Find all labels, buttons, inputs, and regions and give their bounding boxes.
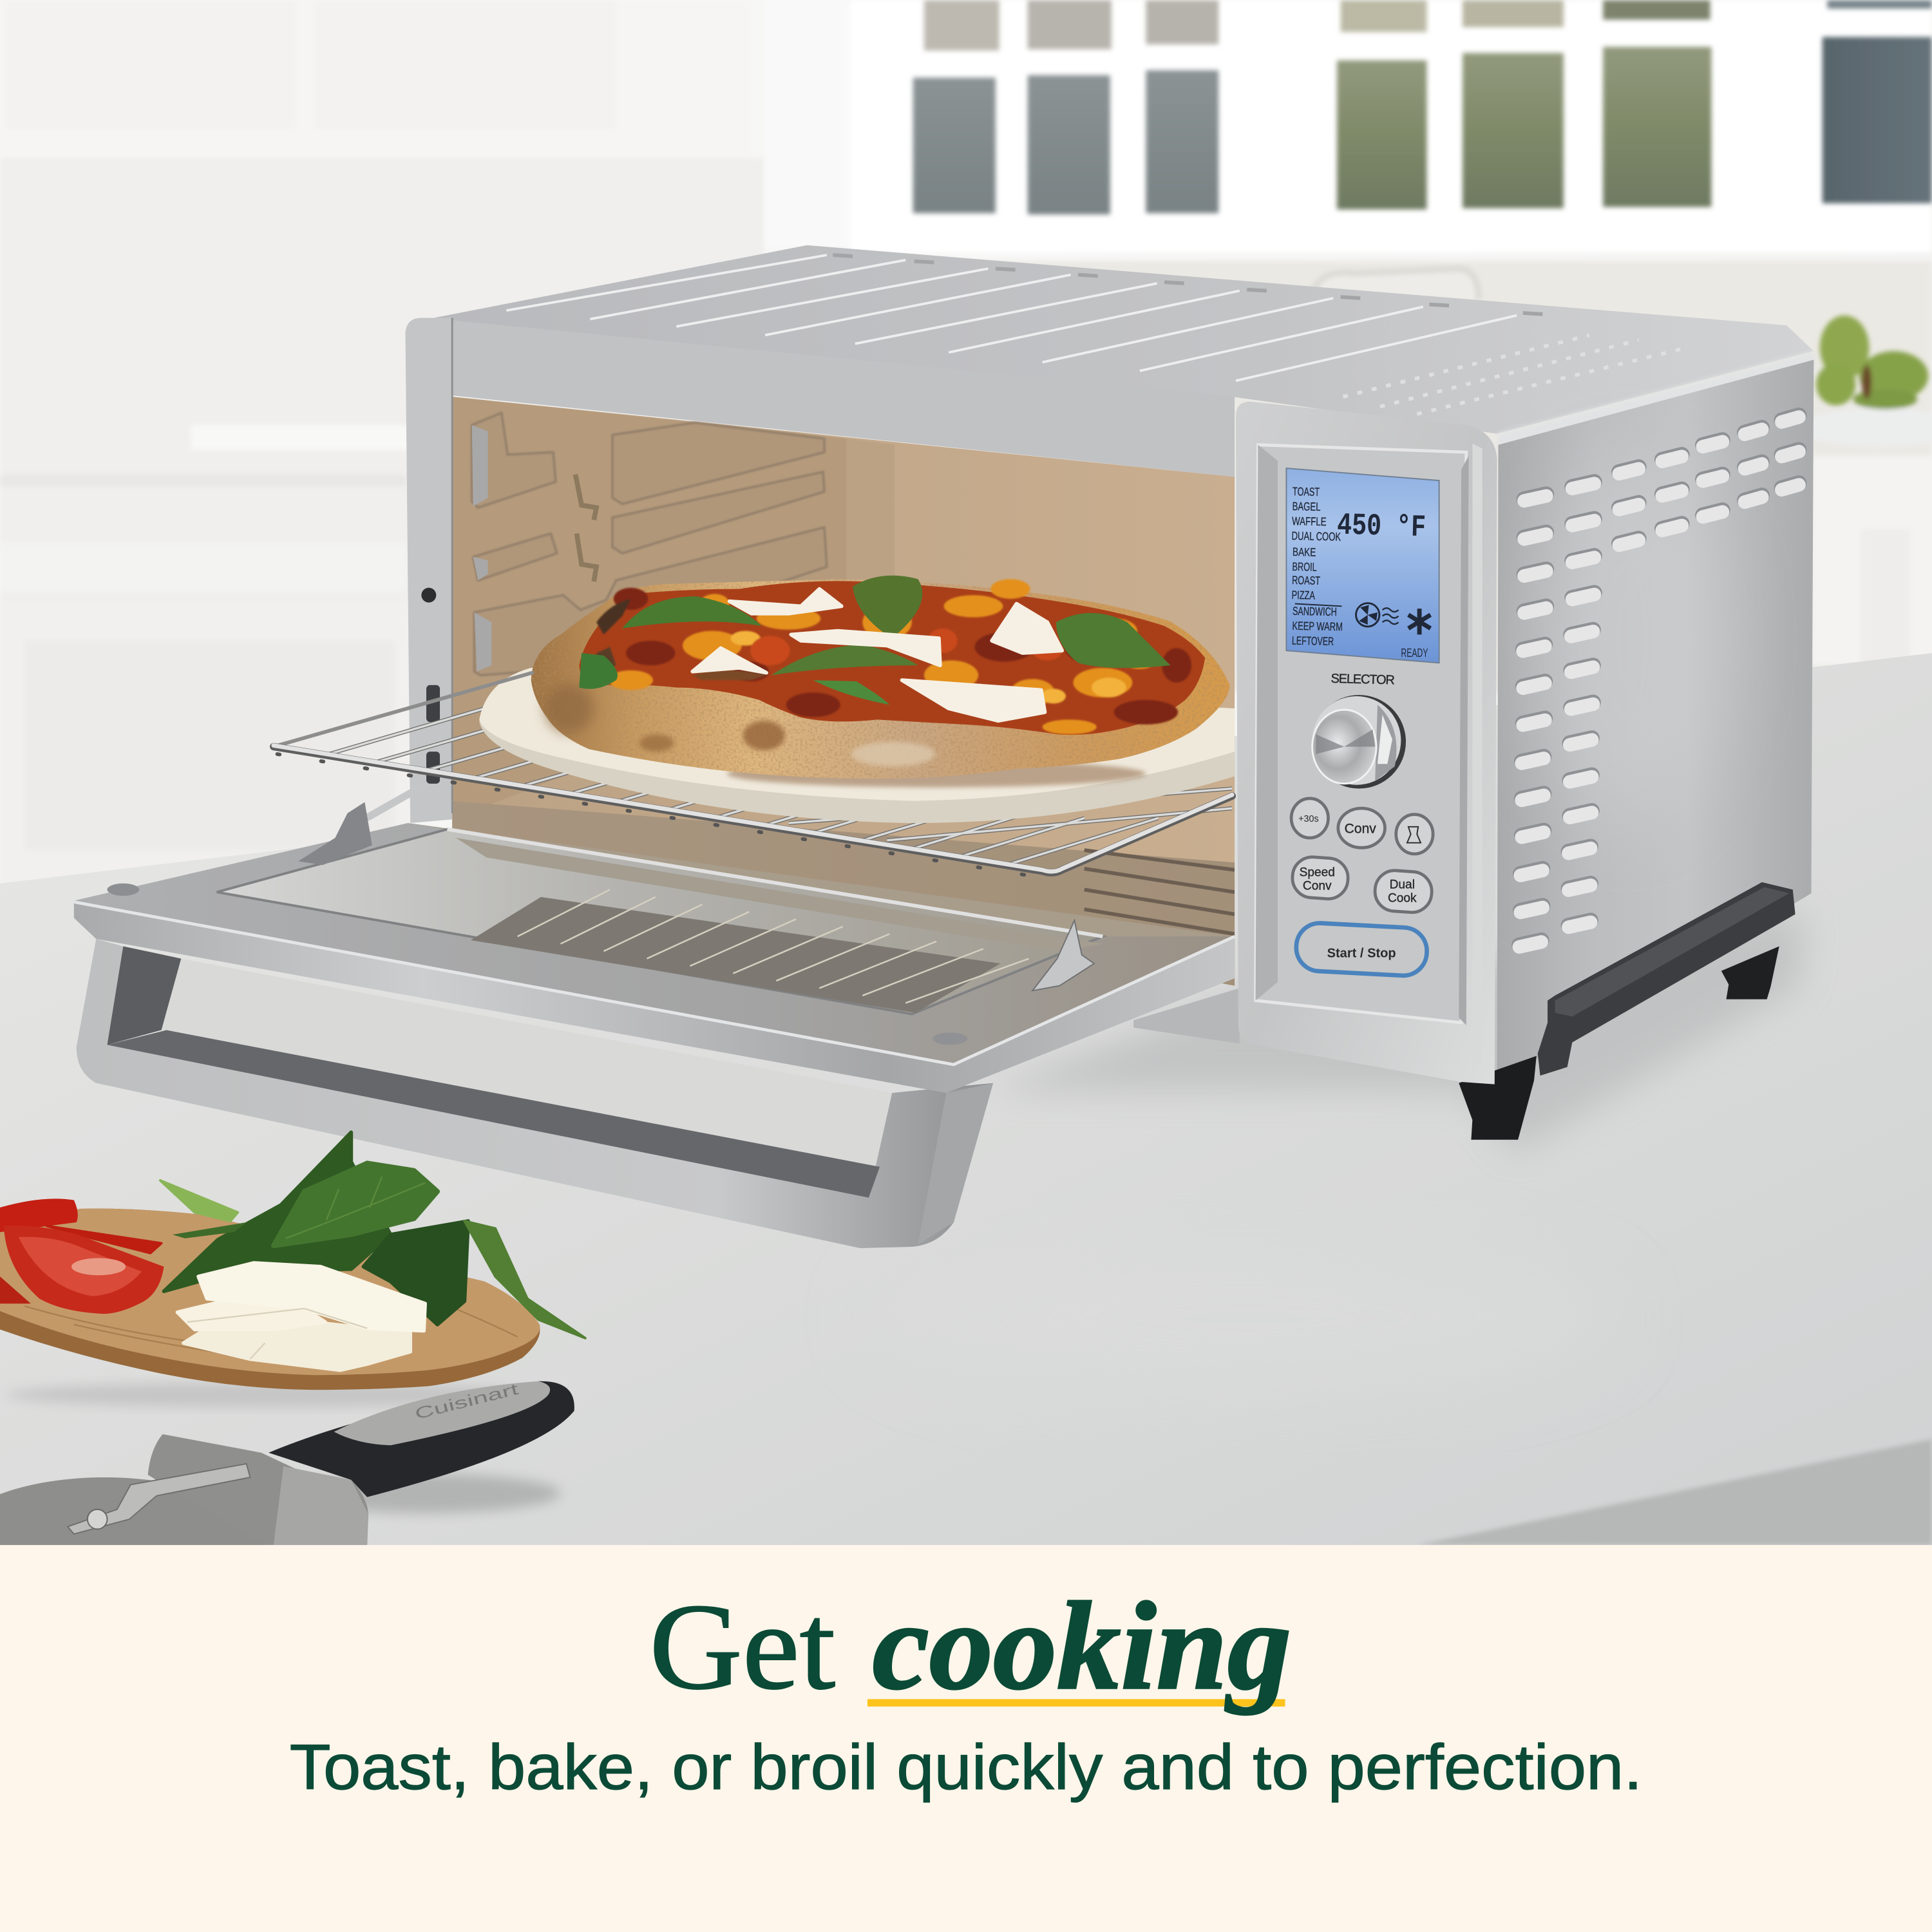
oven feet and rear tray (1459, 882, 1795, 1140)
pizza cutter: Cuisinart (413, 1380, 520, 1423)
pizza (531, 576, 1229, 779)
wooden board (0, 1209, 540, 1390)
LCD display: DUAL COOK (1291, 529, 1341, 544)
fruit bowl (1814, 312, 1932, 444)
mozzarella slices (178, 1263, 425, 1370)
Start / Stop button: Start / Stop (1327, 947, 1396, 961)
sauce and tomatoes (579, 581, 1205, 735)
crust (531, 579, 1229, 779)
window panes (913, 0, 1932, 214)
oven top (433, 245, 1815, 451)
Dual Cook button: Dual (1390, 878, 1415, 891)
control panel (1236, 402, 1497, 1084)
Start / Stop button (1295, 922, 1428, 977)
oven rack rails (274, 673, 1232, 878)
pizza stone (479, 668, 1235, 823)
oven cavity (452, 397, 1235, 986)
cutter wheel (0, 1477, 265, 1615)
Speed Conv button: Speed (1300, 866, 1335, 879)
yellow underline (867, 1699, 1285, 1707)
lower front behind door (1133, 988, 1240, 1044)
+30s button: +30s (1298, 814, 1319, 824)
left pillar (405, 318, 452, 823)
back utensil (1312, 269, 1479, 299)
Dual Cook button (1374, 869, 1433, 914)
door handle loop (77, 939, 993, 1248)
charred crust (596, 599, 766, 680)
light button (1396, 815, 1433, 854)
embossed left wall (472, 413, 827, 675)
LCD display: 450 °F (1336, 508, 1426, 545)
marble counter (0, 653, 1932, 1545)
cutting board with ingredients (0, 1132, 585, 1407)
Dual Cook button: Cook (1388, 892, 1417, 905)
Speed Conv button (1291, 856, 1349, 900)
oven rack wires (320, 706, 1232, 864)
Speed Conv button: Conv (1303, 879, 1332, 893)
tomato slices (0, 1198, 164, 1314)
rack hooks (575, 475, 596, 582)
open door (74, 802, 1235, 1093)
LCD display: BROIL (1292, 560, 1317, 574)
cream caption band (0, 1545, 1932, 1932)
grey embossing faces (472, 425, 491, 672)
LCD display: READY (1401, 647, 1428, 659)
cutter arm and rivet (68, 1464, 250, 1534)
LCD display: PIZZA (1291, 589, 1316, 602)
cutter handle (269, 1381, 574, 1497)
+30s button (1291, 799, 1328, 838)
LCD display: TOAST (1293, 485, 1320, 498)
Conv button (1338, 808, 1385, 848)
LCD display: ROAST (1292, 574, 1320, 587)
oven right side with vents (1497, 360, 1814, 1082)
fan, heat and snowflake icons (1356, 603, 1430, 634)
LCD display (1286, 468, 1439, 663)
basil leaves (579, 576, 1171, 705)
subheading: Toast, bake, or broil quickly and to perfection. (290, 1732, 1642, 1803)
door glass (217, 829, 1103, 1014)
buttons (1291, 799, 1433, 977)
LCD display: SANDWICH (1293, 605, 1337, 618)
Conv button: Conv (1345, 821, 1376, 836)
LCD display: KEEP WARM (1292, 620, 1343, 633)
selector label: SELECTOR (1331, 672, 1395, 688)
LCD display: WAFFLE (1292, 515, 1327, 528)
selector knob (1312, 695, 1406, 788)
headline emphasis: cooking (873, 1577, 1291, 1716)
blurred kitchen background (0, 0, 1932, 884)
front top bar (452, 320, 1235, 477)
door glass rack reflection (518, 889, 1029, 1003)
LCD display: BAGEL (1292, 500, 1321, 513)
LCD display: BAKE (1293, 545, 1316, 559)
basil bunch (160, 1132, 585, 1338)
LCD display: LEFTOVER (1292, 634, 1334, 648)
mozzarella pieces (692, 589, 1062, 721)
cutter guard (148, 1434, 368, 1545)
toaster oven (74, 245, 1815, 1248)
pizza cutter (0, 1380, 574, 1615)
headline: Get (649, 1579, 835, 1715)
door hinges (298, 802, 372, 865)
